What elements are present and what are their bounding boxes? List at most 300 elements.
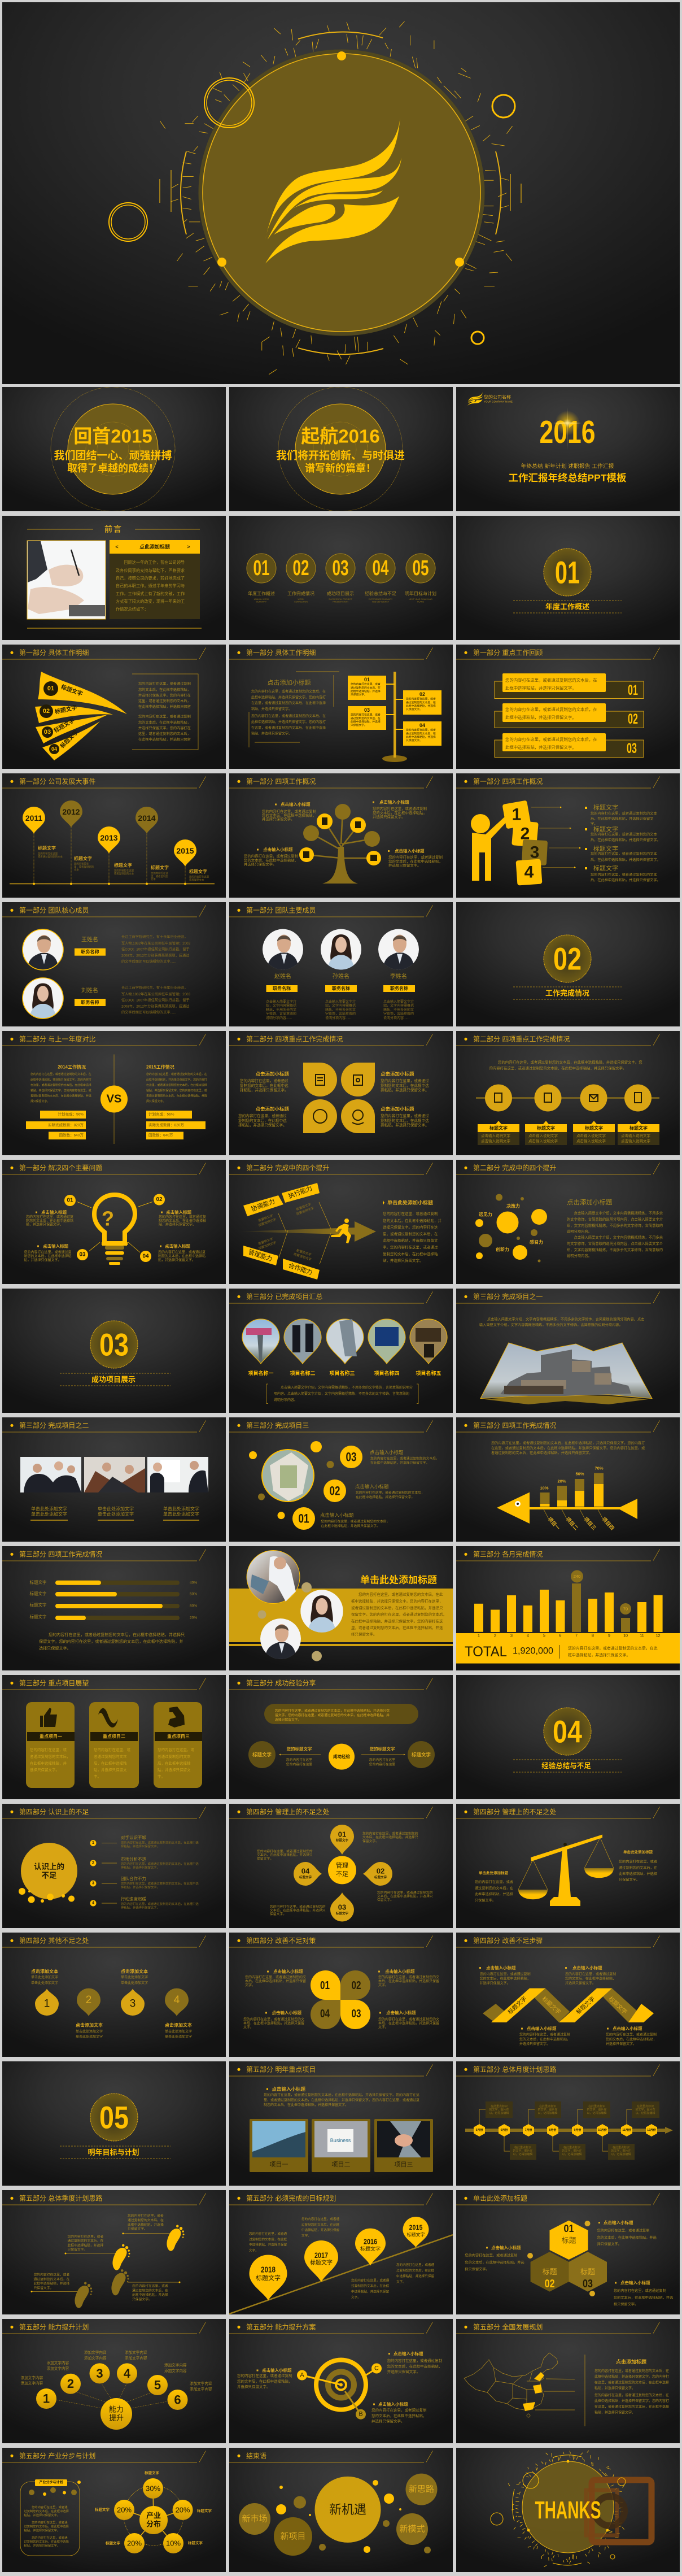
secondary bubbles: 新模式	[399, 2524, 425, 2534]
month labels: 12	[656, 1634, 661, 1638]
dark body text: 或者通过复制您的文本后，在此框中选择粘贴，并选择只	[351, 1605, 443, 1610]
pin labels: 2017	[314, 2251, 328, 2260]
item text: 您的文本后，在此框中选择粘贴，	[388, 859, 443, 863]
item text: 您的内容打在这里，或者通过复制您的文	[245, 1976, 306, 1979]
notes: 过复制您的文本后，在此框	[396, 2268, 435, 2273]
right note: 只保留文字。	[619, 1877, 640, 1882]
bar labels: 标题文字	[29, 1591, 46, 1596]
item text: 您的文本后，在此框中选择粘贴，	[519, 2037, 570, 2042]
intro text panel: 工作，工作模式上有了新的突破，工作	[116, 591, 185, 596]
month hexagons	[474, 2124, 657, 2136]
ability labels	[479, 1203, 543, 1252]
title: 点击添加小标题	[567, 1198, 613, 1206]
callout text: 您的内容打在这里，或者通过复制您的文本后，在	[505, 707, 597, 712]
footprints	[75, 2225, 185, 2308]
left items: 择粘贴，并选择只保留文字。	[240, 1087, 288, 1093]
notes: 保留文字。	[362, 1839, 379, 1843]
total band	[456, 1633, 680, 1664]
banner labels: 标题文字	[54, 704, 78, 716]
milestone text: 里，或者复制您	[151, 874, 168, 878]
heading: 前言	[104, 525, 123, 534]
item text: 您的文本后，在此框中选择粘贴，并选	[465, 2260, 524, 2264]
item text: 您的内容打在这里，或者通过复制	[614, 2289, 666, 2293]
note text: 在此重点标识	[637, 2105, 654, 2108]
item text: 您的内容打在这里，或者通过复制	[606, 2034, 657, 2037]
item text: 您的文本后，在此框中选择粘贴，	[244, 858, 298, 862]
ball notes: 添加文字内容	[47, 2366, 69, 2370]
slide: section 05	[2, 2061, 226, 2186]
small captions: 简要说明文字	[258, 1217, 277, 1228]
card text	[351, 677, 436, 742]
yearly text: 您的内容打在这里，或者通过复制您的文本后，在	[146, 1073, 207, 1076]
notes	[249, 2217, 435, 2300]
names and titles: 职务名称	[81, 949, 99, 955]
card text: 只保留文字。	[351, 723, 367, 726]
list titles: 标题文字	[593, 803, 618, 811]
box dots	[29, 2481, 81, 2496]
photo circles	[247, 1550, 343, 1659]
section title: 经验总结与不足	[541, 1761, 591, 1770]
card text: 您的内容打在这里，或者	[351, 684, 381, 686]
card text: 您的内容打在这里，或	[158, 1748, 194, 1752]
right note	[619, 1850, 658, 1882]
header	[456, 2193, 659, 2205]
list titles: 标题文字	[593, 825, 618, 833]
description text: 点击输入说明文字	[481, 1134, 510, 1138]
section title	[60, 2146, 171, 2159]
card text: 您的内容打在这里，或	[94, 1748, 130, 1752]
secondary bubbles: 新项目	[280, 2532, 306, 2541]
section badge	[90, 1321, 138, 1368]
banner number circles	[40, 681, 59, 754]
section badge: 05	[99, 2099, 129, 2135]
item titles: 点击输入小标题	[604, 2220, 633, 2225]
item text: 制您的文本后，在此框中选择粘	[24, 1254, 72, 1259]
header: 第三部分 完成项目三	[246, 1421, 309, 1429]
section labels: 工作完成情况	[287, 591, 314, 597]
box text: 您的内容打在这里，或者通	[32, 2506, 68, 2509]
item titles: 点击输入小标题	[378, 2401, 408, 2407]
milestone text: 您的内容打在这里	[114, 869, 134, 872]
text: 您的内容打在这里，或者通过复制您的文本后，	[370, 1457, 439, 1461]
milestone text: 或者通过复制您的文本	[38, 854, 63, 859]
item text: 您的文本后，在此框中选择粘贴，	[606, 2037, 657, 2042]
intro text: 的内容打在这里，或者通过复制您的文本后，在此框中选择粘贴，并选择只保留文字。	[489, 1065, 626, 1070]
item titles	[256, 2351, 423, 2407]
ball values: 10%	[166, 2539, 181, 2548]
milestone text: 文本	[74, 868, 79, 871]
left text	[251, 689, 326, 736]
numbered blocks: 2	[521, 825, 530, 843]
biographies: 的文字后面还可以编辑你的文字......	[121, 1010, 176, 1015]
network labels: 标题文字	[197, 2508, 212, 2513]
english captions: ANNUAL WORK	[254, 598, 269, 601]
titles: 点击输入小标题	[370, 1450, 404, 1455]
bracketed text: 点击输入简要文字介绍，文字内容需概括精炼，不用多余的文字修饰，言简意赅的说明分	[281, 1386, 413, 1390]
banner numbers	[43, 685, 57, 752]
descriptions: 精炼，不用多余的文	[266, 1007, 296, 1012]
card text: 只保留文字。	[351, 693, 367, 696]
icon glyphs	[303, 817, 377, 861]
slide: 四项工作概况 tree	[229, 773, 453, 898]
flow notes: 您的内容打在这里	[286, 1762, 312, 1766]
slide: 明年重点项目	[229, 2061, 453, 2186]
banner labels: 标题文字	[59, 729, 80, 750]
text: 保留文字。您的内容打在这里，或者通过复制您的文本后，在此框中选择粘贴，并	[39, 1639, 183, 1644]
zigzag labels	[506, 1995, 629, 2016]
text pill: 您的内容打在这里，或者通过复制您的文本后，在此框中选择粘贴，并选择只保	[275, 1709, 390, 1713]
drop labels: 01	[338, 1830, 346, 1838]
intro text panel: 自己的本职工作。通过半年来的学习与	[116, 583, 185, 588]
slide: 完成中的四个提升 bubbles	[456, 1160, 680, 1284]
text: 您的内容打在这里，或者通过复制您的文本后，	[356, 1491, 425, 1495]
right text: 里，或者通过复制您的文本后，在	[383, 1231, 438, 1236]
drop numbers: 1	[44, 1998, 50, 2010]
biographies: 任COO；2007年担任某公司执行总裁，留于	[121, 947, 190, 951]
left note: 通过复制您的文本后，在	[475, 1886, 513, 1890]
month labels: 6月份	[501, 2128, 508, 2132]
balance strings	[518, 1838, 614, 1890]
drop labels: 标题文字	[336, 1911, 348, 1916]
right note: 此框中选择粘贴，并选择	[619, 1871, 658, 1876]
banner numbers: 04	[51, 746, 57, 752]
item text: 您的内容打在这里，或者通过复	[158, 1251, 206, 1255]
ball numbers: 4	[124, 2366, 131, 2381]
badge numbers	[253, 556, 429, 580]
section badge	[544, 549, 591, 596]
stat labels	[48, 1112, 184, 1138]
card text: 贴，并选择只保留文	[94, 1767, 127, 1772]
callout text: 您的内容打在这里，或者通过复制您的文本后，在	[505, 737, 597, 742]
notes: 您的内容打在这里，或者通过复制您的	[362, 1833, 418, 1836]
list text: 您的内容打在这里，或者通过复制您的文本	[591, 852, 657, 856]
headline: 我们将开拓创新、与时俱进	[276, 450, 405, 462]
notes: 您的内容打在这里，或者	[68, 2235, 103, 2239]
right title: 单击此处添加小标题	[387, 1199, 433, 1206]
network balls	[114, 2478, 193, 2553]
text block: 在此框中选择粘贴，并选择只保留	[138, 737, 191, 741]
item text: 您的内容打在这里，或者通过复制	[388, 855, 443, 860]
text: 您的内容打在这里，或者通过复制您的文本后，在此框中选择粘贴，并选择只	[49, 1633, 185, 1637]
item text: 本后，在此框中选择粘贴，并选择只保留	[378, 1979, 439, 1983]
value bubbles: 70	[623, 1607, 628, 1611]
ability labels: 创新力	[496, 1246, 509, 1252]
section badge: 02	[553, 941, 582, 976]
upper labels: 单击此处添加文字	[121, 1981, 148, 1985]
heading	[27, 525, 202, 628]
notes: 只保留文字。	[128, 2227, 147, 2231]
clover numbers: 01	[320, 1979, 330, 1992]
number badges: 01	[67, 1198, 73, 1203]
item text: 并选择只保留文字。	[373, 813, 405, 819]
english captions: SUCCESSFUL PROJECT	[329, 598, 352, 601]
header	[2, 647, 206, 659]
box text: 粘贴，并选择只保留文字。	[24, 2543, 60, 2548]
flow circles: 标题文字	[412, 1752, 431, 1757]
number markers	[90, 1840, 96, 1906]
body text: 点击输入简要文字介绍，文字内容需概括精炼，不用多余	[574, 1236, 663, 1239]
notes: 此框中选择粘贴，并选择	[34, 2281, 69, 2286]
concentric rings	[278, 387, 403, 511]
numbered circles: 02	[330, 1483, 340, 1498]
panel title bar: 点此添加标题	[139, 543, 170, 550]
item titles: 点击输入小标题	[386, 2010, 416, 2016]
card text: 者通过复制您的文本	[158, 1753, 191, 1759]
note text: 以，记得加编辑	[489, 2111, 509, 2115]
list text	[591, 811, 661, 882]
captions: 单击此处添加文字	[163, 1506, 199, 1512]
body text: 点击输入简要文字介绍，文字内容需概括精炼，不用多余	[574, 1211, 663, 1216]
right text: 您的内容打在这里，或者通过复制	[383, 1212, 438, 1216]
item text: 本后，在此框中选择粘贴，并选择只保留	[243, 2021, 304, 2026]
section badge: 04	[553, 1714, 582, 1749]
slide: 总体季度计划思路	[2, 2190, 226, 2314]
bar labels: 标题文字	[29, 1602, 46, 1608]
notes: 只保留文字。	[34, 2286, 53, 2290]
small captions: 简要说明文字	[258, 1240, 277, 1251]
callout text: 此框中选择粘贴，并选择只保留文字。	[505, 685, 576, 690]
header	[229, 647, 432, 659]
slide: 2016 cover	[456, 387, 680, 511]
header: 第四部分 其他不足之处	[19, 1937, 89, 1944]
notes: 文本后，在此框中选择粘贴，并选择只	[270, 1908, 326, 1913]
flow labels	[287, 1746, 395, 1751]
ball notes	[20, 2350, 212, 2391]
left items	[238, 1071, 289, 1128]
year labels: 2014	[138, 813, 156, 823]
section labels	[248, 591, 436, 597]
text: 选择只保留文字。	[39, 1646, 71, 1651]
names: 赵姓名	[274, 973, 291, 980]
description text: 点击输入说明文字	[528, 1134, 558, 1138]
biographies: 军人物.1982年在某公司担任中层管理；2003	[121, 941, 191, 945]
text block: 在此框中选择粘贴，并选择只保留	[138, 704, 191, 708]
note text: 在此重点标识	[514, 2146, 531, 2149]
box text: 过复制您的文本后，在此框中选择	[24, 2539, 69, 2544]
label text: 标题文字	[489, 1125, 508, 1131]
icon circles	[299, 813, 381, 865]
year labels: 2015	[176, 846, 194, 855]
captions: 单击此处添加文字	[98, 1511, 134, 1516]
item text: 您的内容打在这里，或者通过复制您的文	[243, 2018, 304, 2021]
note boxes	[486, 2101, 659, 2160]
header: 第三部分 各月完成情况	[473, 1550, 543, 1558]
milestone text	[38, 852, 209, 881]
small captions: 能量的文字	[296, 1203, 312, 1212]
header: 单击此处添加标题	[473, 2194, 527, 2202]
description text: 点击输入说明文字	[621, 1138, 650, 1143]
pin labels: 2018	[261, 2265, 276, 2274]
header: 第五部分 总体季度计划思路	[19, 2194, 102, 2202]
photo pins	[242, 1319, 447, 1364]
tree	[303, 804, 380, 884]
company logo: YOUR COMPANY NAME	[484, 400, 513, 403]
item text: 本后，在此框中选择粘贴，并选择只保留	[378, 2021, 439, 2026]
ball values: 20%	[176, 2506, 190, 2514]
list titles	[585, 803, 618, 872]
month labels: 3	[510, 1634, 513, 1638]
lower labels: 点击添加文本	[76, 2022, 103, 2028]
card text: 通过复制您的文本后，在	[406, 700, 436, 704]
note text: 以，记得加编辑	[587, 2111, 607, 2115]
band text: 框中选择粘贴，并选择只保留文字。	[568, 1652, 630, 1657]
item titles: 点击输入标题	[41, 1209, 67, 1215]
body text: 说明分项内容。	[567, 1229, 592, 1234]
box text: 过复制您的文本后，在此框中选择	[24, 2524, 69, 2529]
numbered circles: 01	[298, 1512, 309, 1525]
list text: 您的内容打在这里，或者通过复制您的文本	[591, 873, 657, 877]
banner labels	[247, 1184, 313, 1277]
biographies: 2008年。2012年分别获得某某奖项，后通过	[121, 1004, 189, 1008]
item text: 贴，并选择只保留文字。	[26, 1222, 63, 1227]
hexagons	[531, 2221, 607, 2292]
notes: 您的内容打在这里，或者通	[351, 2279, 389, 2283]
header: 结束语	[246, 2452, 266, 2460]
milestone text: 或者复制您的文本	[114, 871, 134, 876]
drop labels: 03	[338, 1903, 346, 1912]
left items: 复制您的文本后，在此框中选	[240, 1082, 288, 1088]
timeline axis	[10, 826, 215, 885]
lower labels: 单击此处添加文字	[165, 2030, 192, 2034]
biographies: 长江工商学院研究生，有十余年行业经验，	[121, 986, 188, 990]
flow circles: 标题文字	[252, 1752, 272, 1757]
numbered circles: 03	[346, 1450, 357, 1464]
item titles	[121, 1835, 146, 1901]
right items: 择粘贴，并选择只保留文字。	[381, 1087, 429, 1093]
descriptions: 点击输入简要文字介	[266, 1000, 296, 1004]
ball notes: 添加文字内容	[164, 2364, 187, 2368]
text block: 您的内容打在这里，或者通过复制	[138, 682, 191, 686]
total figures: TOTAL	[465, 1644, 507, 1660]
header: 第四部分 改善不足步骤	[473, 1937, 543, 1944]
item text: 您的内容打在这里，或者通过复制	[565, 1973, 616, 1976]
clover numbers	[320, 1979, 361, 2020]
small captions	[256, 1201, 315, 1262]
panel: hero cover logo	[2, 2, 680, 384]
header: 第二部分 四项重点工作完成情况	[473, 1035, 570, 1043]
biographies: 的文字后面还可以编辑你的文字......	[121, 959, 176, 964]
notes: 文字。	[249, 2248, 259, 2252]
item titles: 点击输入小标题	[379, 799, 409, 804]
list text: 您的内容打在这里，或者通过复制您的文本	[591, 833, 657, 837]
note text: 的文字，图片在	[587, 2108, 607, 2112]
icon: running figure	[331, 1219, 351, 1243]
connectors	[479, 2109, 632, 2151]
banner labels: 标题文字	[53, 717, 76, 734]
hexagon labels: 标题	[561, 2236, 576, 2245]
item text: 您的内容打在这里，或者通过复制	[480, 1973, 531, 1976]
biographies: 军人物.1982年在某公司担任中层管理；2003	[121, 991, 191, 996]
note text: 在此重点标识	[539, 2105, 556, 2108]
ability labels: 决策力	[506, 1203, 520, 1209]
bar labels: 标题文字	[29, 1613, 46, 1619]
biographies	[121, 934, 191, 1015]
item text: 您的内容打在这里，或者通过复制	[465, 2254, 517, 2257]
decorative tick burst	[160, 21, 513, 375]
section badge	[544, 935, 591, 982]
titles	[320, 1450, 404, 1518]
box text: 您的内容打在这里，或者通	[32, 2521, 68, 2525]
header: 第五部分 全国发展规划	[473, 2323, 543, 2331]
item text: 您的内容打在这里，或者通过复制	[371, 2409, 427, 2412]
rounded text box: 产业分步与计划	[39, 2480, 63, 2484]
goal pins	[250, 2217, 429, 2300]
intro text panel: 回顾这一年的工作，我在公司领导	[124, 560, 185, 565]
main circle: 不足	[42, 1871, 57, 1880]
item titles: 市场分析不透	[121, 1856, 146, 1862]
item text: 您的内容打在这里，或者通过复制	[519, 2034, 570, 2037]
header: 第二部分 与上一年度对比	[19, 1035, 95, 1043]
header: 第三部分 完成项目之一	[473, 1293, 543, 1300]
item text: 制您的文本后，在此框中选择粘	[159, 1219, 206, 1223]
header	[229, 1420, 432, 1432]
month labels: 1	[478, 1634, 480, 1638]
item text: 您的文本后，在此框中选择粘贴，	[262, 812, 316, 817]
item titles: 点击输入小标题	[281, 801, 311, 807]
names and titles: 王姓名	[81, 935, 98, 943]
numbered balls	[36, 2363, 187, 2410]
header: 第三部分 完成项目之二	[19, 1421, 89, 1429]
ball values	[117, 2484, 190, 2548]
item text: 您的文本后，在此框中选择粘贴，并选	[597, 2235, 657, 2239]
target spokes	[302, 2368, 377, 2414]
caption underlines	[30, 1520, 199, 1521]
header: 第四部分 管理上的不足之处	[246, 1808, 329, 1816]
section labels: 成功项目展示	[327, 591, 354, 597]
item text: 您的内容打在这里，或者通过复制	[597, 2229, 649, 2233]
dark body text: 保留文字。您的内容打在这里，或者通过复制您的文本后，	[351, 1612, 447, 1617]
item titles: 点击输入小标题	[273, 1968, 303, 1974]
item titles: 点击输入小标题	[262, 2367, 292, 2373]
glow star	[553, 407, 582, 450]
header	[229, 1807, 432, 1818]
item text: 您的文本后，在此框中选择粘贴，	[371, 2413, 427, 2418]
dark body text: 框中选择粘贴，并选择只保留文字。您的内容打在这里，	[351, 1598, 443, 1603]
item text: 本后，在此框中选择粘贴，并选择只保留	[245, 1979, 306, 1983]
item text: 您的内容打在这里，或者通过复制您的文本后，在此框中选	[121, 1903, 199, 1906]
note text: 在此重点标识	[563, 2146, 580, 2149]
month labels: 9	[608, 1634, 610, 1638]
box text: 过复制您的文本后，在此框中选择	[24, 2509, 69, 2513]
month labels: 8月份	[549, 2128, 556, 2132]
main bubble: 新机遇	[329, 2503, 366, 2517]
yellow callouts	[502, 673, 606, 751]
header	[229, 1034, 432, 1046]
callout text: 此框中选择粘贴，并选择只保留文字。	[505, 745, 576, 750]
ball numbers: 1	[43, 2392, 50, 2405]
signpost cards	[348, 676, 441, 746]
item text: 您的内容打在这里，或者通过复制	[373, 807, 427, 811]
notes: 您的内容打在这里，或者	[132, 2285, 168, 2288]
header: 第五部分 总体月度计划思路	[473, 2065, 556, 2073]
intro: 制您的文本后，在此框中选择粘贴，并选择只保留文字。	[264, 2103, 348, 2107]
year pins	[23, 800, 196, 867]
body text: 的文字修饰，言简意赅的说明分项内容，点击输入简要文字介	[567, 1241, 663, 1246]
item text: 并选择只保留文字。	[371, 2418, 404, 2423]
upper labels	[31, 1968, 148, 1985]
left text: 粘贴，并选择只保留文字。	[251, 707, 292, 711]
slide: 能力提升方案	[229, 2319, 453, 2443]
month labels: 8	[592, 1634, 594, 1638]
descriptions: 绍，文字内容需概括	[325, 1003, 356, 1008]
captions: 单击此处添加文字	[163, 1511, 199, 1516]
right note: 单击此处添加标题	[623, 1850, 653, 1854]
titles: 点击输入小标题	[320, 1512, 354, 1518]
section title	[513, 600, 622, 613]
target	[316, 2360, 366, 2410]
slide: THANKS	[456, 2448, 680, 2572]
header: 第三部分 重点项目展望	[19, 1679, 89, 1687]
